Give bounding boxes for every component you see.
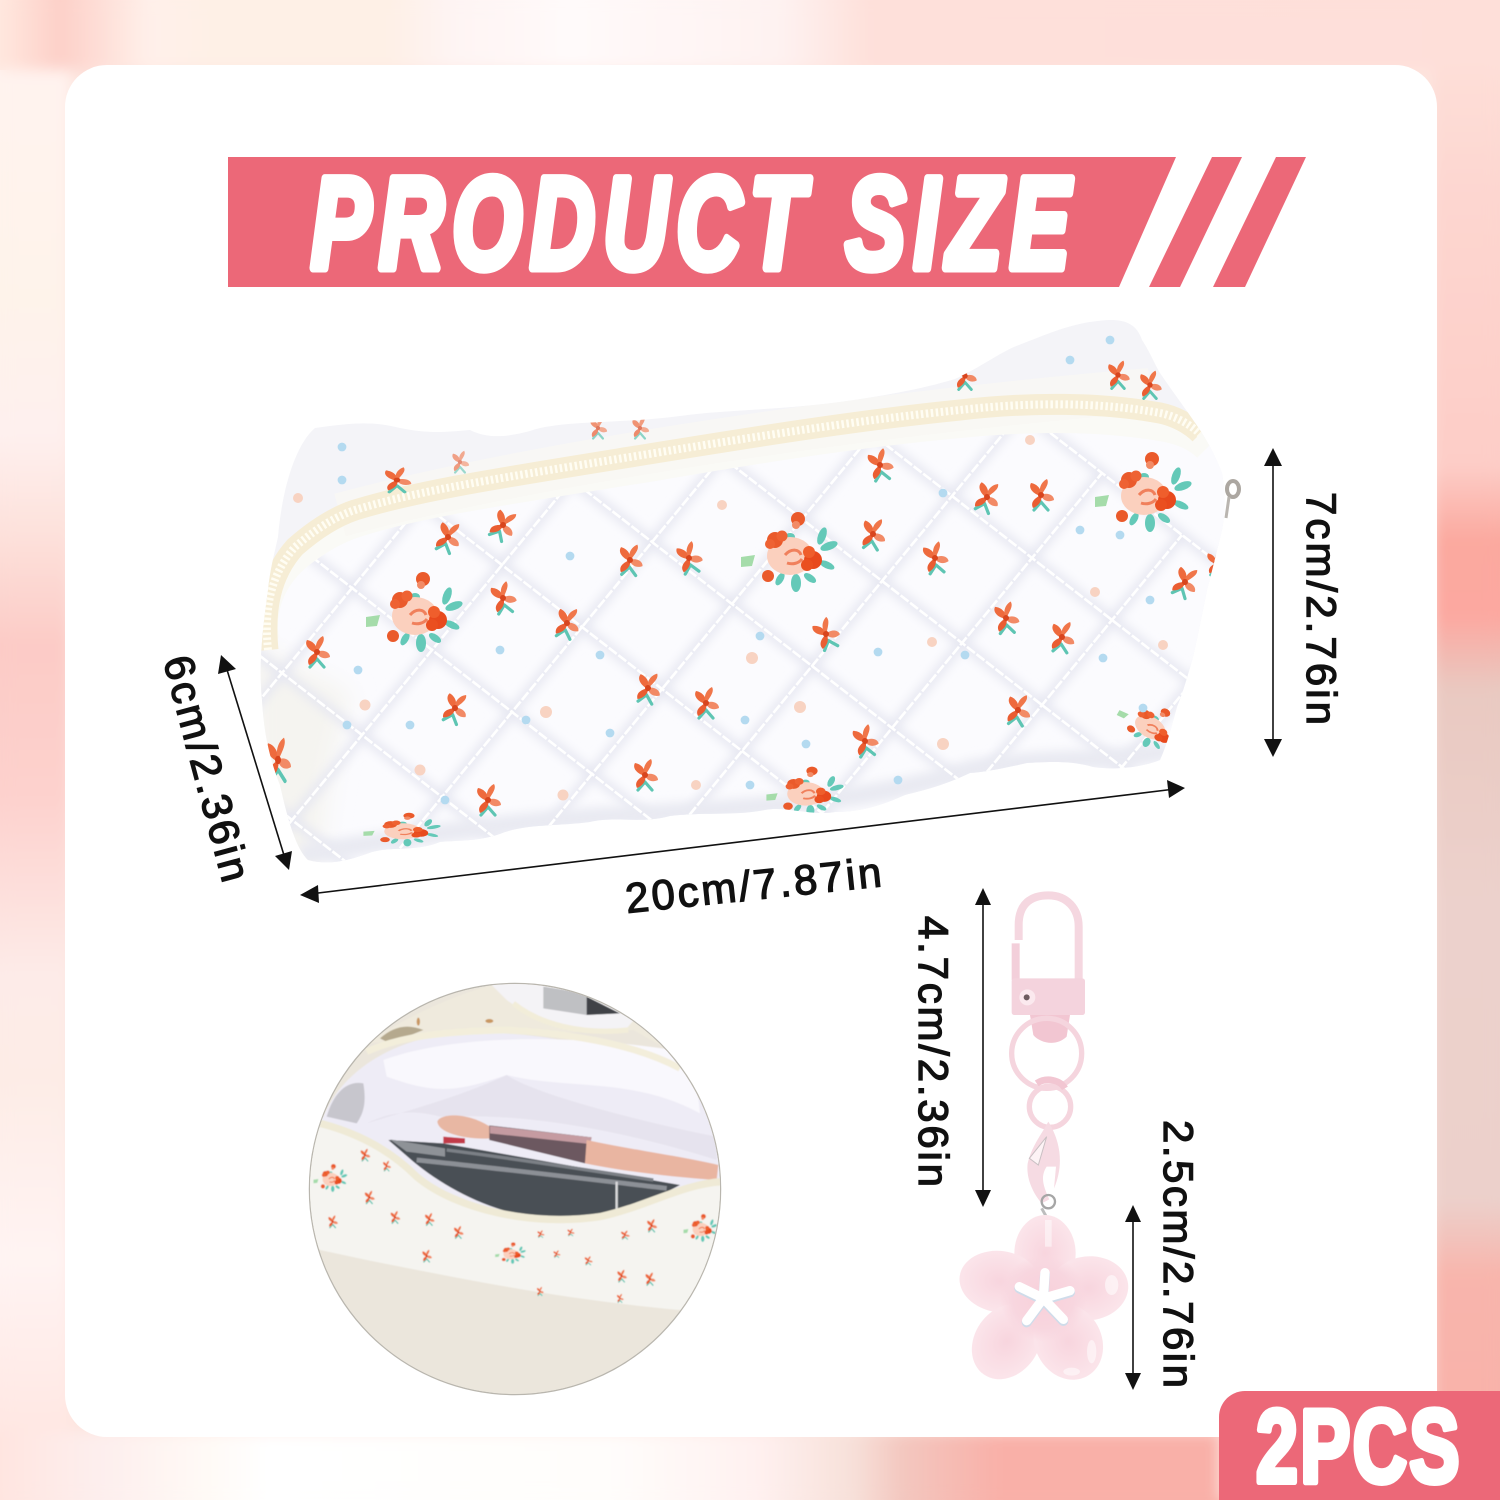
front panel (307, 1120, 723, 1313)
arrow: 6cm (218, 655, 292, 870)
arrow: 20cm (300, 780, 1185, 903)
zipper (267, 404, 1200, 650)
sakura charm (955, 1215, 1131, 1393)
banner bar (228, 157, 1176, 287)
label: 2.5cm/2.76in: 2.5cm/2.76in (1155, 1120, 1202, 1388)
pouch body (261, 320, 1225, 862)
clasp loop (1019, 895, 1079, 980)
interior lining (320, 1033, 723, 1217)
floral bouquets (363, 452, 1193, 846)
keychain photo (955, 895, 1131, 1393)
title: PRODUCT SIZE (311, 150, 1078, 296)
pens (388, 1140, 680, 1217)
arrow: 4.7cm (975, 888, 991, 1207)
title banner (228, 150, 1306, 296)
upper pouch (372, 1018, 662, 1046)
arrow: 7cm (1264, 448, 1282, 757)
banner stripe two (1213, 157, 1306, 287)
zipper pull (1226, 481, 1239, 518)
clasp gate (1004, 943, 1028, 980)
ring small (1029, 1086, 1071, 1127)
ring large (1012, 1018, 1082, 1088)
pouch bottom shadow (300, 750, 1170, 855)
lobster clasp (1027, 1122, 1060, 1217)
pouch photo (260, 320, 1241, 862)
badge box (1219, 1391, 1500, 1500)
dimension: length (300, 780, 1185, 922)
dimension: depth (154, 650, 292, 886)
quilt stitching (261, 433, 1208, 860)
label: 6cm/2.36in: 6cm/2.36in (154, 650, 260, 886)
charm stamen (1019, 1274, 1070, 1322)
label: 20cm/7.87in: 20cm/7.87in (623, 848, 884, 922)
clasp base (1012, 978, 1085, 1043)
pouch left side (261, 667, 344, 847)
quantity badge (1219, 1389, 1500, 1500)
arrow: 2.5cm (1125, 1205, 1141, 1390)
dimension: clasp height (910, 888, 991, 1207)
inset: pouch interior (300, 980, 740, 1400)
label: 7cm/2.76in: 7cm/2.76in (1298, 492, 1345, 725)
label: 4.7cm/2.36in: 4.7cm/2.36in (910, 916, 957, 1187)
dimension: height (1264, 448, 1345, 757)
makeup brush (437, 1115, 490, 1139)
small flowers (267, 361, 1226, 815)
banner stripe one (1149, 157, 1242, 287)
dimension: charm height (1125, 1120, 1202, 1390)
pouch front panel (261, 433, 1208, 860)
peach buds and blue dots (293, 336, 1168, 804)
zipper tape (302, 422, 1058, 563)
flower print (313, 1149, 718, 1303)
quilt shading (261, 433, 1216, 861)
